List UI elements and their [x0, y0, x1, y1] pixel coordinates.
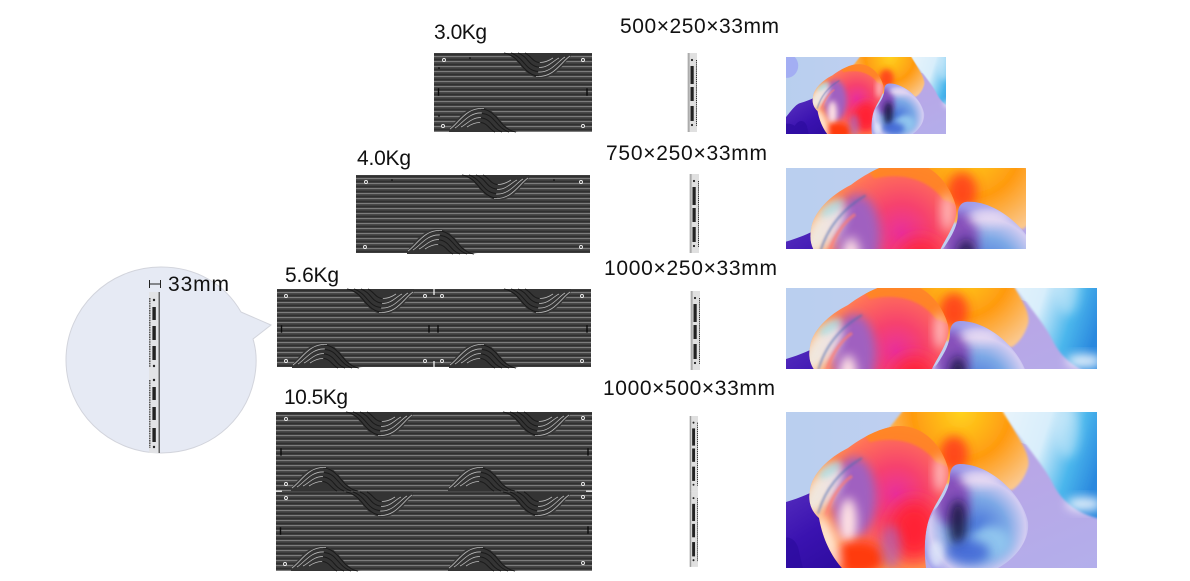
panel back: 500×250	[434, 53, 592, 132]
label: 33mm: 33mm	[168, 273, 229, 296]
panel back: 1000×500	[276, 412, 592, 571]
size label: 1000×250×33mm: 1000×250×33mm	[604, 257, 777, 280]
weight label: 3.0Kg: 3.0Kg	[434, 21, 487, 44]
size label: 750×250×33mm: 750×250×33mm	[606, 142, 767, 165]
panel back: 1000×250	[277, 289, 591, 368]
speech bubble: panel depth callout	[66, 267, 271, 453]
side strip: 500×250	[687, 53, 697, 132]
side strip: 750×250	[689, 174, 699, 253]
screen image: 500×250	[786, 57, 946, 134]
size label: 1000×500×33mm: 1000×500×33mm	[603, 377, 775, 400]
dimension marker	[150, 280, 160, 288]
weight label: 10.5Kg: 10.5Kg	[284, 386, 348, 409]
weight label: 5.6Kg: 5.6Kg	[285, 264, 339, 287]
bubble background	[66, 267, 271, 453]
size label: 500×250×33mm: 500×250×33mm	[620, 15, 779, 38]
side strip: 1000×250	[690, 291, 700, 370]
side profile strip	[149, 292, 160, 453]
screen image: 1000×500	[786, 412, 1097, 568]
screen image: 1000×250	[786, 288, 1097, 369]
side strip: 1000×500	[689, 416, 698, 567]
screen image: 750×250	[786, 168, 1026, 249]
weight label: 4.0Kg: 4.0Kg	[357, 147, 411, 170]
panel back: 750×250	[356, 175, 590, 254]
